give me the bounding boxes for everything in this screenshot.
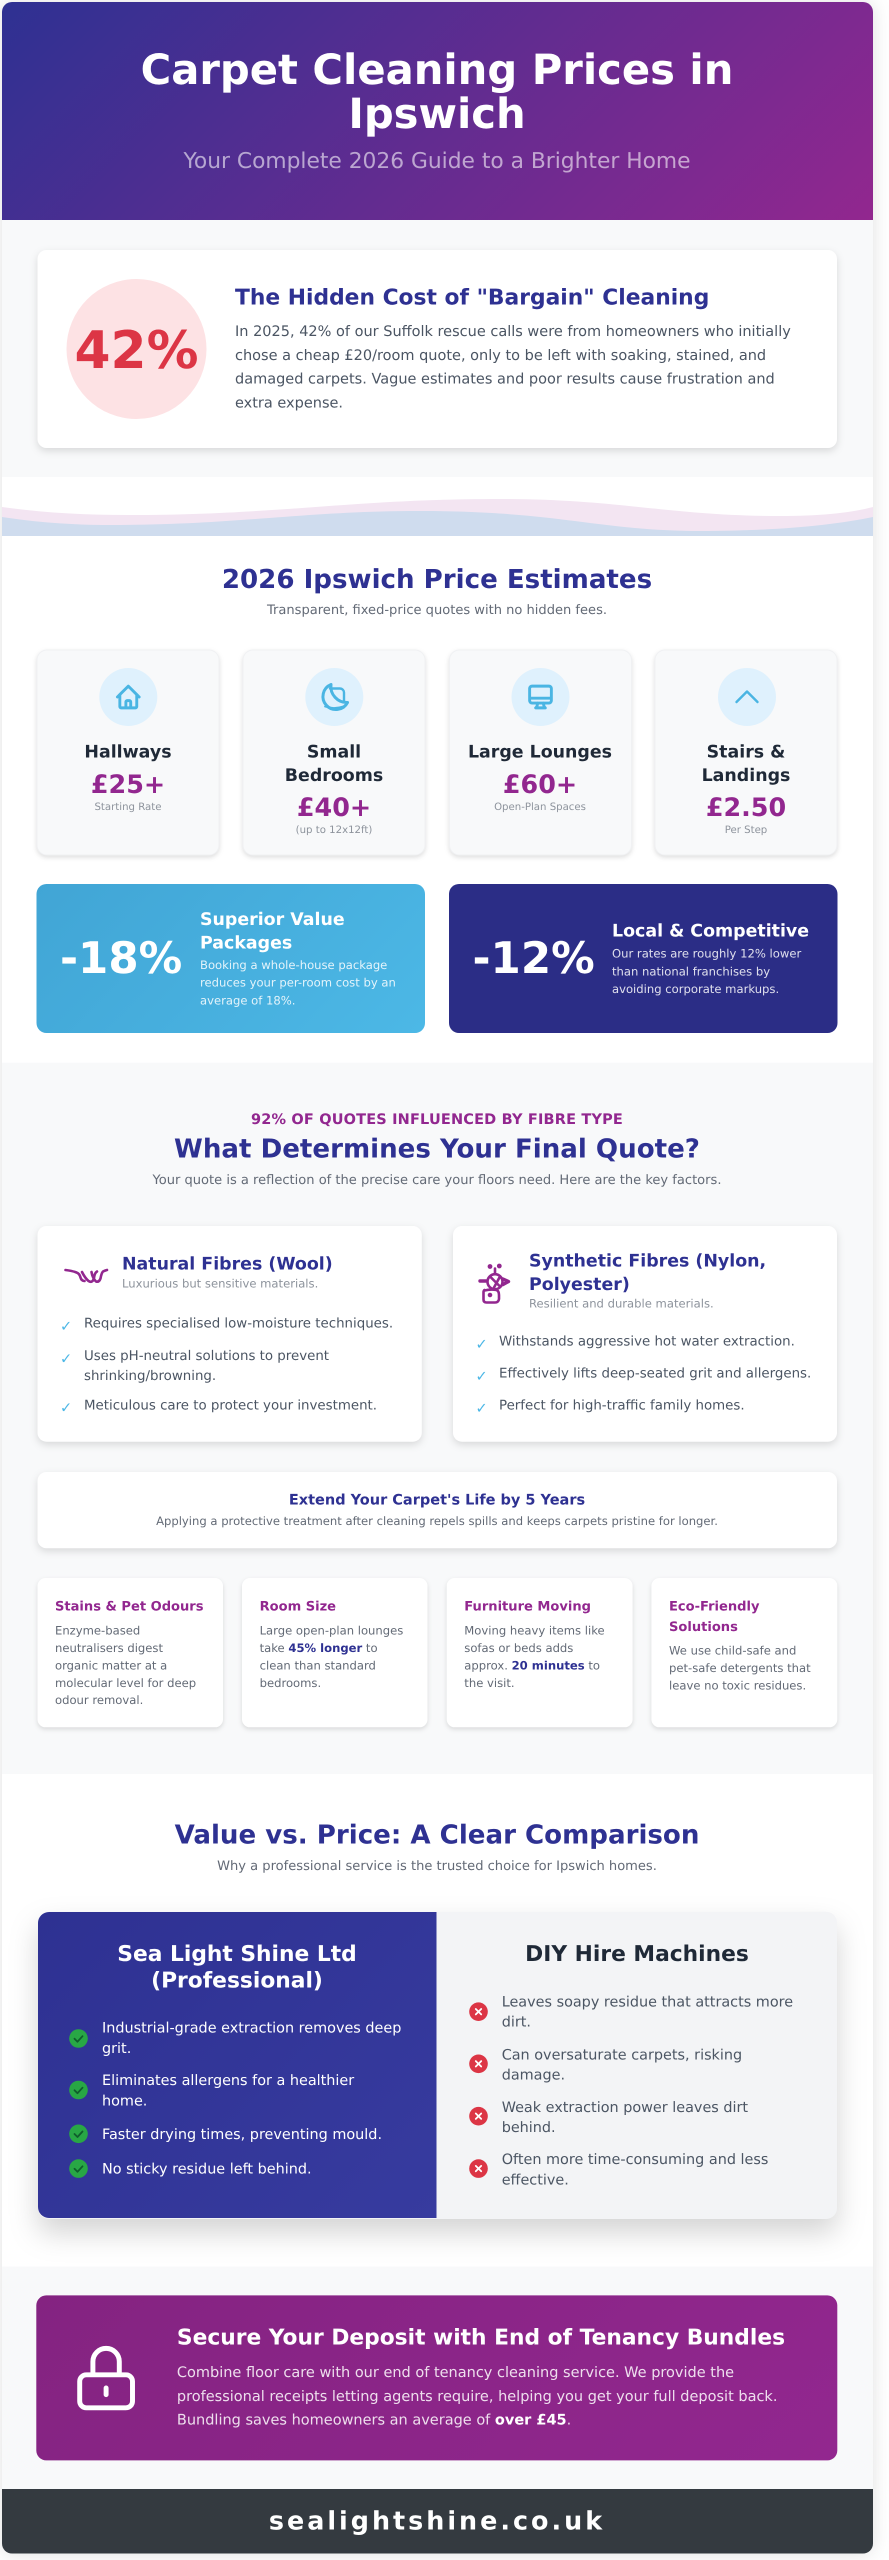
callout: extend carpet life: Extend Your Carpet's Life by 5 Years bbox=[289, 1493, 585, 1509]
factor card: eco-friendly solutions: Solutions bbox=[669, 1620, 738, 1635]
list: DIY drawbacks: Can oversaturate carpets, risking bbox=[502, 2047, 742, 2063]
factor card: stains and pet odours: Enzyme-based bbox=[55, 1623, 140, 1637]
main title: Carpet Cleaning Prices in bbox=[141, 45, 733, 94]
banner: local and competitive: -12% bbox=[472, 934, 595, 984]
checklist: synthetic fibres: ✓ bbox=[476, 1337, 488, 1353]
eyebrow label: 92% OF QUOTES INFLUENCED BY FIBRE TYPE bbox=[251, 1112, 623, 1128]
factor card: furniture moving: sofas or beds adds bbox=[464, 1641, 573, 1655]
checklist: synthetic fibres: ✓ bbox=[476, 1369, 488, 1385]
card body text: extra expense. bbox=[235, 396, 343, 412]
factor card: stains and pet odours bbox=[38, 1578, 223, 1727]
factor card: stains and pet odours: organic matter at a bbox=[55, 1658, 167, 1672]
list: DIY drawbacks: dirt. bbox=[502, 2015, 531, 2031]
list: DIY drawbacks: Leaves soapy residue that attracts more bbox=[502, 1995, 793, 2011]
footer bbox=[2, 2489, 873, 2554]
banner: local and competitive: avoiding corporate markups. bbox=[612, 982, 779, 996]
section: final quote factors bbox=[31, 1113, 844, 1733]
banner: end of tenancy: professional receipts letting agents require, helping you get your full deposit back. bbox=[177, 2389, 777, 2405]
panel: DIY hire machines bbox=[469, 1942, 793, 2188]
banner: superior value packages: Superior Value bbox=[200, 910, 345, 930]
factor card: room size: take 45% longer to bbox=[260, 1641, 378, 1655]
comparison card bbox=[38, 1912, 837, 2219]
checklist: synthetic fibres: Effectively lifts deep-seated grit and allergens. bbox=[499, 1366, 811, 1381]
checklist: natural fibres: ✓ bbox=[60, 1400, 72, 1416]
checklist: natural fibres: Requires specialised low-moisture techniques. bbox=[84, 1317, 393, 1332]
section subheading: Your quote is a reflection of the precise care your floors need. Here are the key factors. bbox=[152, 1173, 721, 1188]
card: synthetic fibres: Resilient and durable materials. bbox=[529, 1297, 714, 1311]
list: professional benefits: Faster drying times, preventing mould. bbox=[102, 2127, 382, 2143]
icon: monitor bbox=[530, 686, 551, 708]
panel: professional bbox=[38, 1912, 436, 2218]
factor card: stains and pet odours: molecular level for deep bbox=[55, 1676, 196, 1690]
banner: local and competitive bbox=[449, 884, 838, 1033]
factor card: furniture moving bbox=[447, 1578, 633, 1727]
list: DIY drawbacks: Often more time-consuming and less bbox=[502, 2152, 768, 2168]
checklist: natural fibres: ✓ bbox=[60, 1319, 72, 1335]
section heading: Value vs. Price: A Clear Comparison bbox=[175, 1820, 699, 1850]
list: DIY drawbacks: Weak extraction power leaves dirt bbox=[502, 2100, 748, 2116]
factor card: stains and pet odours: neutralisers digest bbox=[55, 1641, 163, 1655]
stat circle: 42%: 42% bbox=[75, 321, 198, 381]
factor card: furniture moving: Moving heavy items like bbox=[464, 1623, 605, 1637]
icon: chevron up bbox=[736, 692, 758, 702]
list: professional benefits: Industrial-grade extraction removes deep bbox=[102, 2021, 401, 2037]
list: DIY drawbacks: effective. bbox=[502, 2172, 569, 2188]
banner: superior value packages: -18% bbox=[60, 934, 182, 984]
checklist: natural fibres: Meticulous care to protect your investment. bbox=[84, 1398, 377, 1413]
checklist: natural fibres bbox=[60, 1317, 393, 1416]
section: deposit bundles bbox=[2, 2267, 873, 2489]
section heading: 2026 Ipswich Price Estimates bbox=[222, 565, 652, 595]
section: hidden cost bbox=[31, 246, 844, 458]
factor card: furniture moving: the visit. bbox=[464, 1676, 515, 1690]
callout: extend carpet life bbox=[38, 1472, 837, 1548]
panel: DIY hire machines: DIY Hire Machines bbox=[525, 1942, 749, 1967]
card body text: In 2025, 42% of our Suffolk rescue calls were from homeowners who initially bbox=[235, 324, 791, 340]
card: natural fibres: Luxurious but sensitive materials. bbox=[122, 1276, 318, 1290]
card: synthetic fibres: Synthetic Fibres (Nylon, bbox=[529, 1252, 766, 1272]
main title: Ipswich bbox=[348, 89, 526, 138]
banner: local and competitive: Local & Competitive bbox=[612, 922, 809, 942]
section: price estimates bbox=[36, 565, 838, 1033]
list: professional benefits bbox=[69, 2021, 401, 2178]
icon: padlock bbox=[80, 2348, 132, 2408]
icon: house bbox=[117, 686, 139, 708]
section subheading: Transparent, fixed-price quotes with no hidden fees. bbox=[266, 603, 607, 618]
wave divider bbox=[2, 499, 873, 536]
factor card: room size bbox=[242, 1578, 428, 1727]
header banner bbox=[2, 2, 873, 220]
price card: small bedrooms: £40+ bbox=[297, 792, 371, 822]
list: DIY drawbacks: damage. bbox=[502, 2068, 565, 2084]
price card: small bedrooms: (up to 12x12ft) bbox=[296, 825, 372, 836]
card body text: chose a cheap £20/room quote, only to be left with soaking, stained, and bbox=[235, 348, 766, 364]
banner: end of tenancy bbox=[36, 2295, 837, 2460]
list: professional benefits: No sticky residue left behind. bbox=[102, 2162, 312, 2178]
price card: stairs and landings: £2.50 bbox=[706, 792, 786, 822]
card heading: The Hidden Cost of "Bargain" Cleaning bbox=[235, 286, 709, 310]
price card: stairs and landings bbox=[655, 650, 837, 855]
icon: moon bbox=[323, 684, 348, 710]
stat circle: 42% bbox=[66, 279, 206, 419]
price card: large lounges bbox=[450, 650, 632, 855]
price card: small bedrooms: Bedrooms bbox=[285, 766, 383, 786]
checklist: natural fibres: shrinking/browning. bbox=[84, 1369, 216, 1384]
card: hidden cost bbox=[38, 250, 837, 448]
banner: end of tenancy: Bundling saves homeowners an average of over £45. bbox=[177, 2412, 571, 2428]
factor card: room size: Room Size bbox=[260, 1600, 336, 1615]
price card: large lounges: £60+ bbox=[503, 769, 577, 799]
banner: end of tenancy: Secure Your Deposit with End of Tenancy Bundles bbox=[177, 2325, 785, 2350]
banner: superior value packages bbox=[36, 884, 425, 1033]
factor card: stains and pet odours: Stains & Pet Odours bbox=[55, 1600, 204, 1615]
card: natural fibres: Natural Fibres (Wool) bbox=[122, 1254, 333, 1274]
factor card: room size: bedrooms. bbox=[260, 1676, 321, 1690]
banner: superior value packages: Booking a whole-house package bbox=[200, 958, 387, 972]
checklist: natural fibres: Uses pH-neutral solutions to prevent bbox=[84, 1349, 329, 1364]
footer: sealightshine.co.uk bbox=[269, 2506, 605, 2536]
factor card: stains and pet odours: odour removal. bbox=[55, 1693, 143, 1707]
list: professional benefits: home. bbox=[102, 2093, 147, 2109]
price card: hallways: Hallways bbox=[84, 743, 172, 763]
card: synthetic fibres: Polyester) bbox=[529, 1275, 630, 1295]
factor card: room size: clean than standard bbox=[260, 1658, 376, 1672]
price card: small bedrooms bbox=[243, 650, 425, 855]
banner: superior value packages: average of 18%. bbox=[200, 993, 295, 1007]
factor card: eco-friendly solutions bbox=[651, 1578, 837, 1727]
panel: professional: Sea Light Shine Ltd bbox=[117, 1942, 357, 1967]
banner: local and competitive: than national franchises by bbox=[612, 964, 770, 978]
section subheading: Why a professional service is the trusted choice for Ipswich homes. bbox=[217, 1859, 657, 1874]
checklist: synthetic fibres: Perfect for high-traffic family homes. bbox=[499, 1398, 745, 1413]
price card: stairs and landings: Stairs & bbox=[707, 743, 785, 763]
list: professional benefits: Eliminates allergens for a healthier bbox=[102, 2073, 354, 2089]
icon: synthetic molecule bbox=[480, 1265, 508, 1302]
factor card: eco-friendly solutions: Eco-Friendly bbox=[669, 1600, 760, 1615]
price card: stairs and landings: Landings bbox=[702, 766, 790, 786]
checklist: synthetic fibres bbox=[476, 1334, 811, 1417]
banner: end of tenancy: Combine floor care with our end of tenancy cleaning service. We provide the bbox=[177, 2365, 734, 2381]
card body text: damaged carpets. Vague estimates and poor results cause frustration and bbox=[235, 372, 775, 388]
price card: hallways: £25+ bbox=[91, 769, 165, 799]
factor card: eco-friendly solutions: pet-safe detergents that bbox=[669, 1661, 811, 1675]
callout: extend carpet life: Applying a protective treatment after cleaning repels spills and keeps carpets pristine for longer. bbox=[156, 1514, 718, 1528]
checklist: natural fibres: ✓ bbox=[60, 1352, 72, 1368]
price card: large lounges: Open-Plan Spaces bbox=[494, 802, 586, 813]
price card: hallways: Starting Rate bbox=[94, 802, 162, 813]
list: professional benefits: grit. bbox=[102, 2041, 131, 2057]
factor card: furniture moving: Furniture Moving bbox=[464, 1600, 591, 1615]
list: DIY drawbacks: behind. bbox=[502, 2120, 556, 2136]
factor card: room size: Large open-plan lounges bbox=[260, 1623, 403, 1637]
card: synthetic fibres bbox=[453, 1226, 837, 1442]
banner: local and competitive: Our rates are roughly 12% lower bbox=[612, 947, 801, 961]
list: DIY drawbacks bbox=[469, 1995, 793, 2188]
section heading: What Determines Your Final Quote? bbox=[174, 1134, 700, 1164]
checklist: synthetic fibres: ✓ bbox=[476, 1401, 488, 1417]
banner: superior value packages: reduces your per-room cost by an bbox=[200, 976, 396, 990]
banner: superior value packages: Packages bbox=[200, 933, 292, 953]
checklist: synthetic fibres: Withstands aggressive hot water extraction. bbox=[499, 1334, 795, 1349]
factor card: eco-friendly solutions: We use child-safe and bbox=[669, 1644, 796, 1658]
section: value comparison bbox=[38, 1820, 837, 2219]
factor card: eco-friendly solutions: leave no toxic residues. bbox=[669, 1679, 806, 1693]
price card: hallways bbox=[37, 650, 219, 855]
price card: stairs and landings: Per Step bbox=[725, 825, 767, 836]
icon: wool squiggle bbox=[66, 1270, 107, 1282]
panel: professional: (Professional) bbox=[151, 1969, 323, 1994]
factor card: furniture moving: approx. 20 minutes to bbox=[464, 1658, 600, 1672]
price card: small bedrooms: Small bbox=[307, 743, 361, 763]
subtitle: Your Complete 2026 Guide to a Brighter Home bbox=[183, 149, 690, 174]
card: natural fibres bbox=[38, 1226, 422, 1442]
price card: large lounges: Large Lounges bbox=[468, 743, 612, 763]
